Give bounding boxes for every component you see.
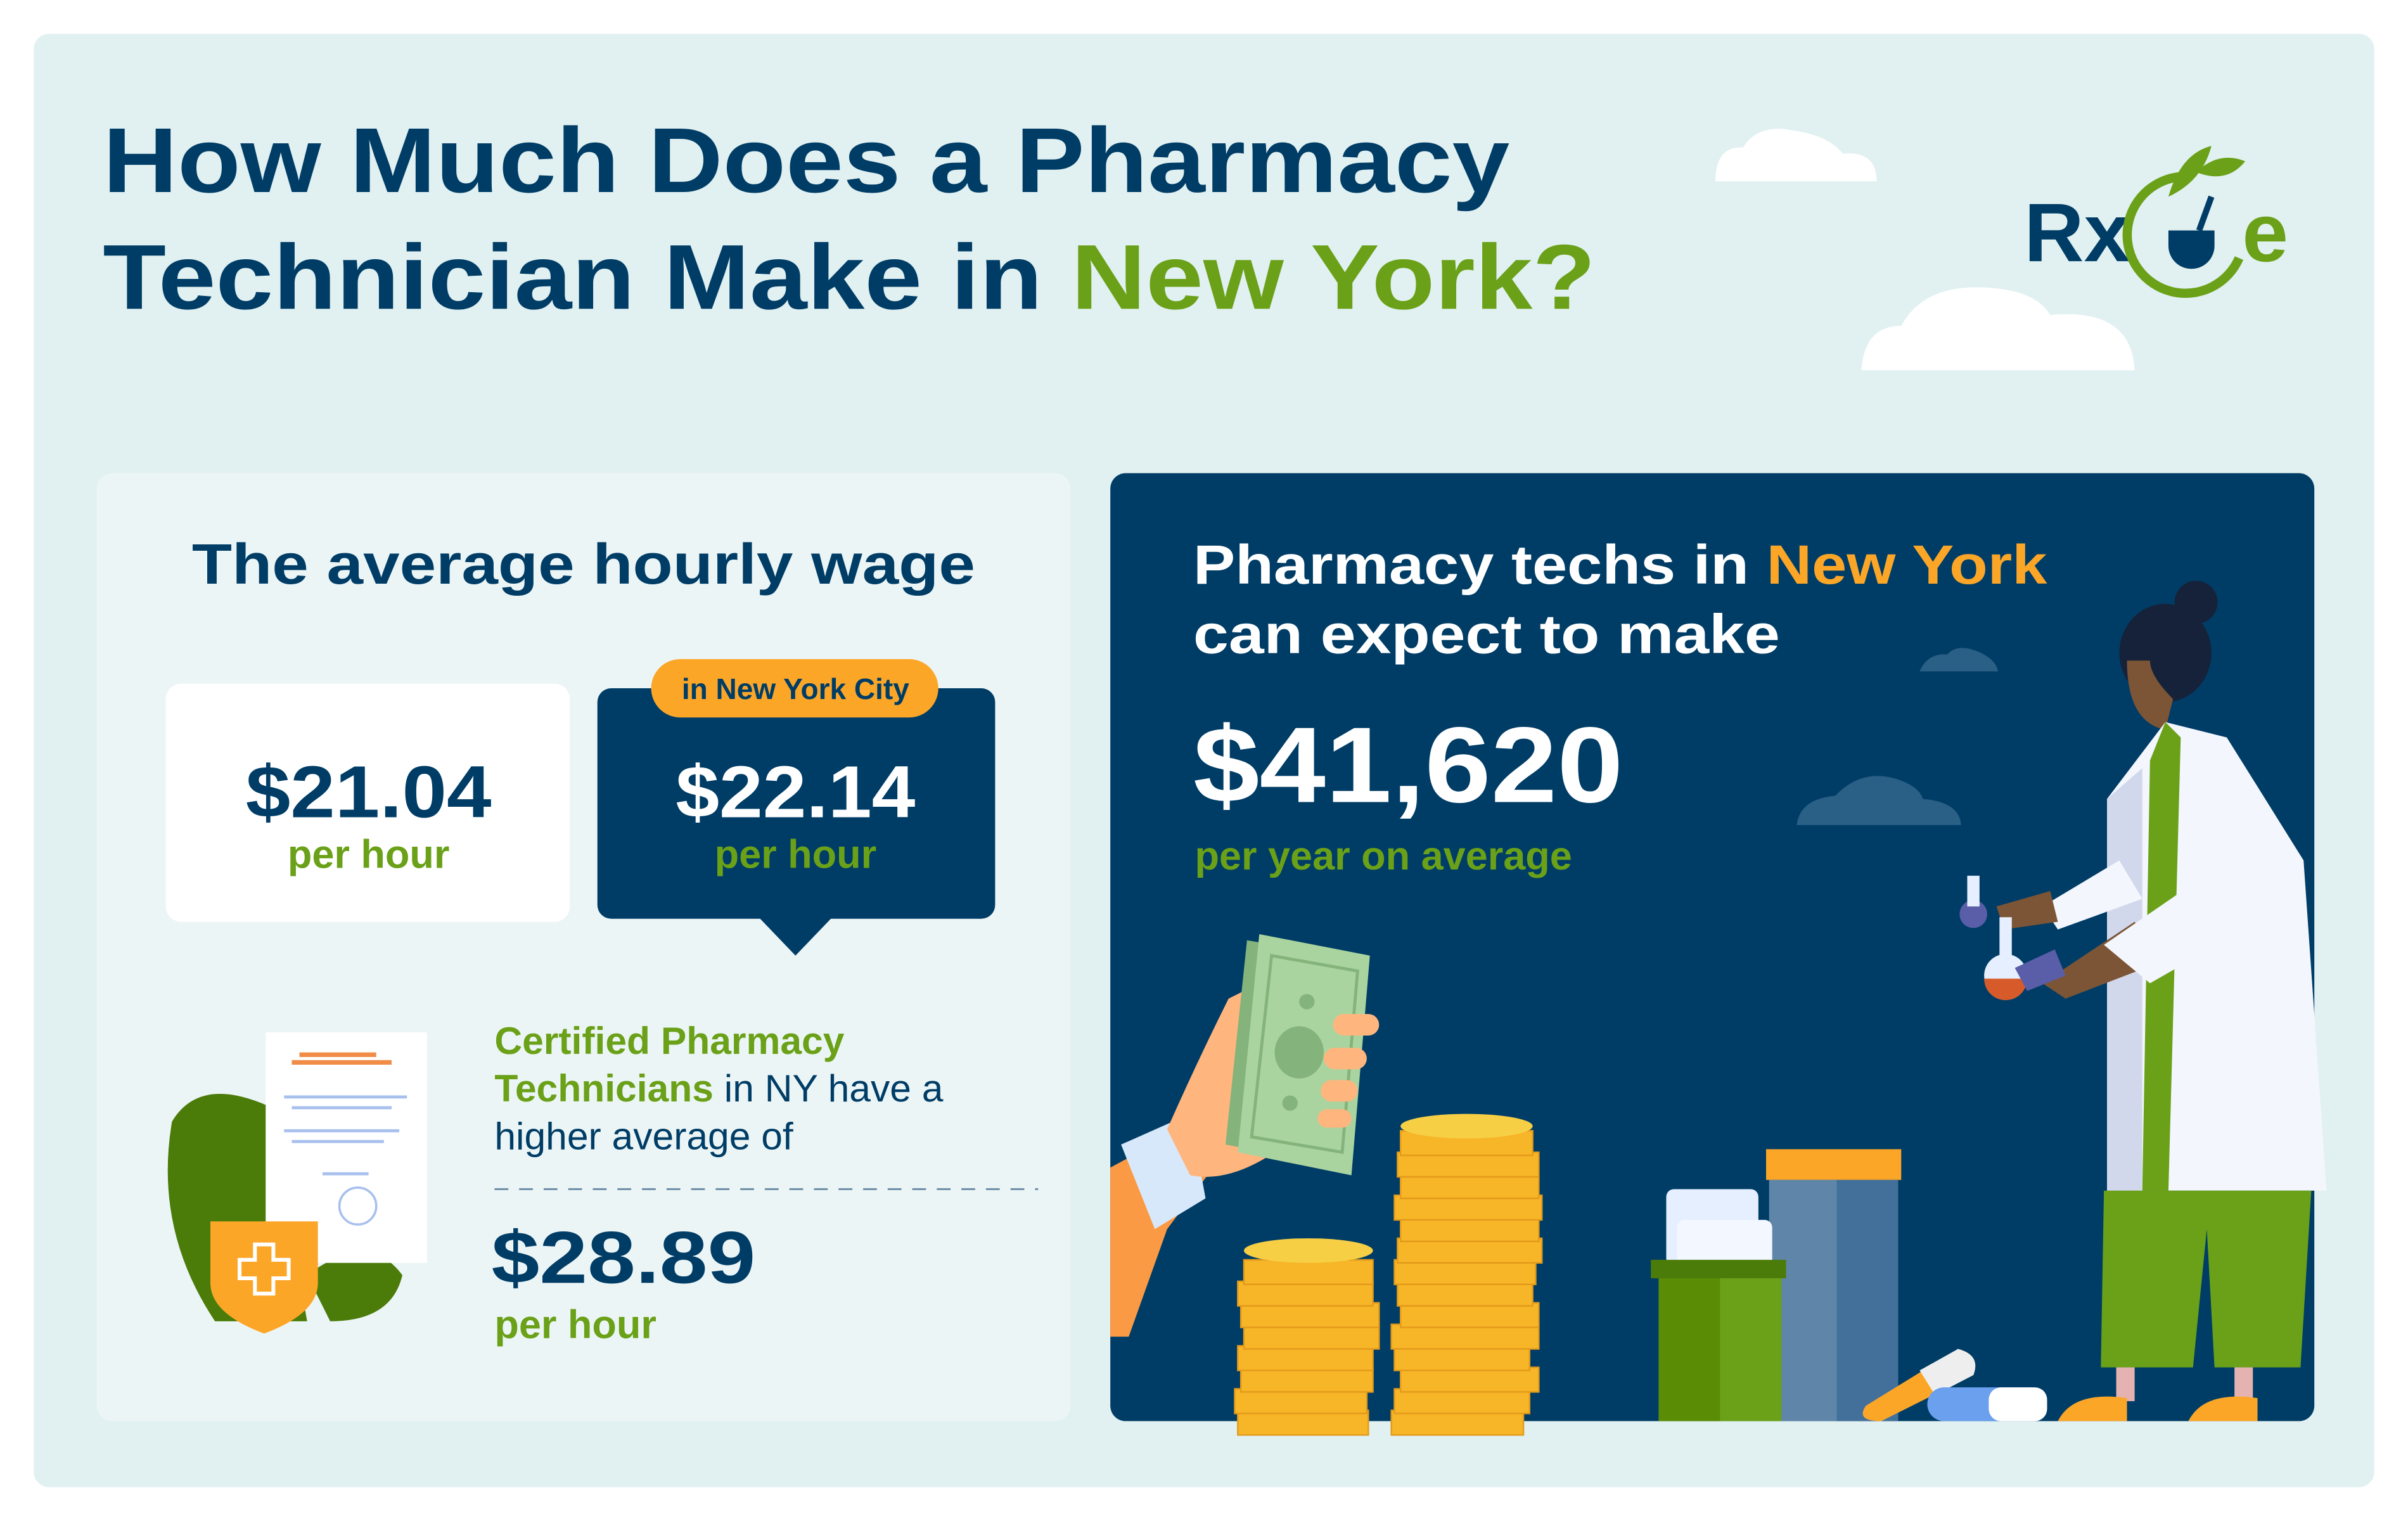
box: state wage: per hour [288, 833, 449, 877]
box: state wage: $21.04 [246, 751, 492, 833]
certified wage value: $28.89 [492, 1216, 755, 1299]
heading: average hourly wage: The average hourly wage [192, 533, 975, 596]
illustration: coin stacks [1234, 1114, 1542, 1435]
text: certified technicians: higher average of [494, 1114, 793, 1157]
illustration: hand with money [1110, 934, 1379, 1337]
small clouds [1796, 648, 1998, 825]
certified wage value: per hour [494, 1303, 656, 1347]
title [103, 108, 1596, 328]
yearly value: $41,620 [1193, 704, 1623, 825]
title: How Much Does a Pharmacy [103, 108, 1509, 212]
illustration: pill jars [1651, 1149, 2047, 1421]
text: certified technicians: Certified Pharmacy [494, 1019, 845, 1062]
box: NYC wage [598, 659, 995, 956]
text: certified technicians: Technicians in NY have a [494, 1067, 944, 1110]
logo: RxCe [2024, 146, 2288, 293]
logo: RxCe: e [2242, 186, 2288, 279]
box: NYC wage: per hour [715, 833, 876, 877]
certified wage value [492, 1216, 755, 1347]
panel: yearly salary: can expect to make [1193, 603, 1780, 665]
heading: yearly: Pharmacy techs in New York [1193, 534, 2047, 596]
panel: yearly salary: per year on average [1194, 834, 1572, 878]
box: state wage [166, 684, 570, 922]
illustration: certificate with leaf and shield [168, 1032, 427, 1333]
panel: yearly salary [1110, 473, 2327, 1435]
illustration: pharmacist woman [1959, 581, 2327, 1421]
cloud top [1715, 129, 1876, 181]
panel: average hourly wage [97, 473, 1070, 1421]
box: NYC wage: in New York City [682, 672, 909, 705]
title: Technician Make in New York? [103, 225, 1596, 328]
logo: RxCe: Rx [2024, 186, 2130, 279]
cloud bottom [1861, 287, 2135, 370]
box: NYC wage: $22.14 [676, 751, 916, 833]
text: certified technicians [494, 1019, 944, 1157]
